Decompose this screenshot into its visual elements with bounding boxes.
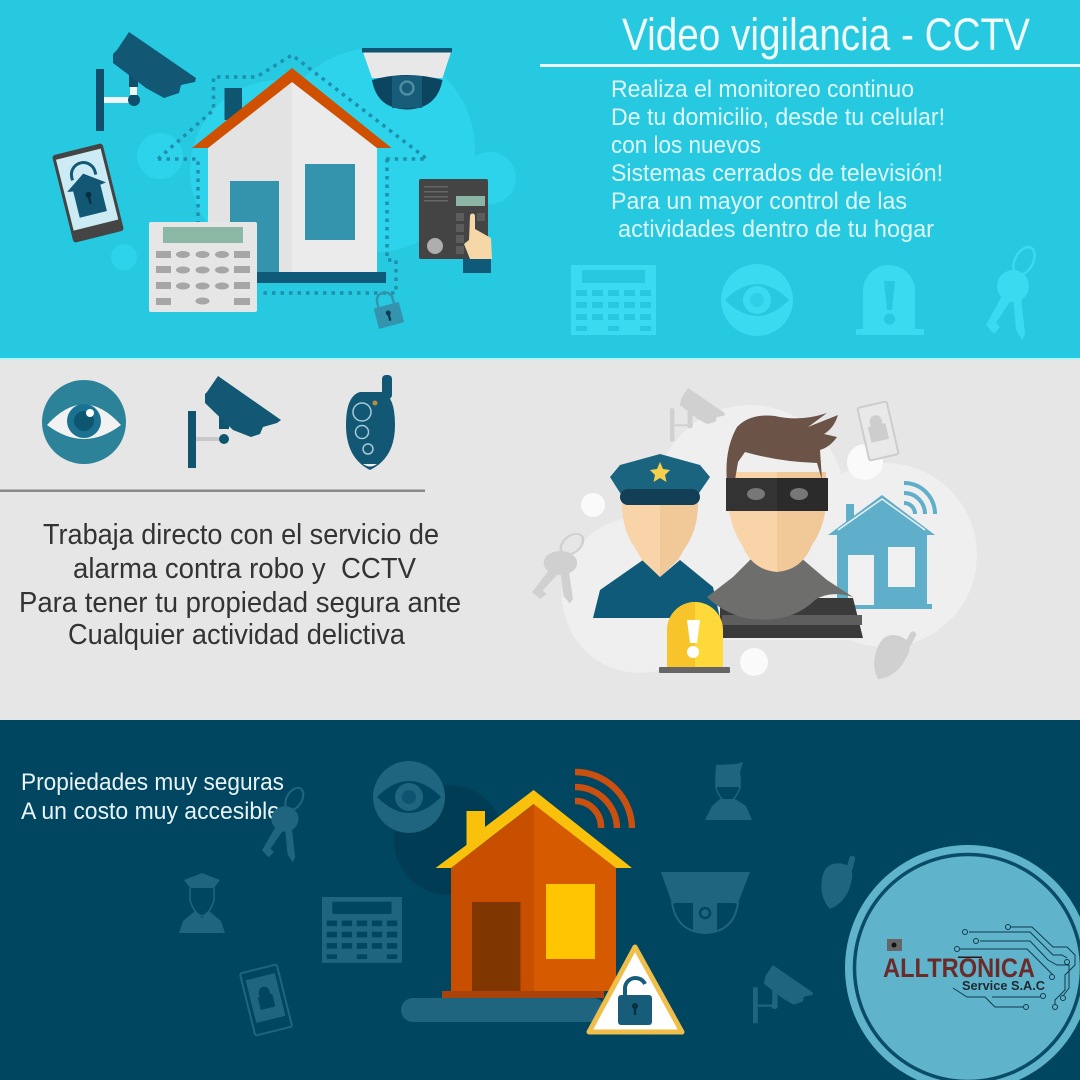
text block: top description: actividades dentro de tu hogar (618, 216, 934, 243)
icon: orange wifi waves (575, 772, 632, 828)
icon: yellow alarm beacon (659, 602, 730, 673)
text block: top description: Realiza el monitoreo continuo (611, 76, 914, 103)
dotted perimeter (158, 55, 427, 293)
text block: top description: De tu domicilio, desde tu celular! (611, 104, 945, 131)
faded icon row (571, 244, 1039, 340)
icon: padlock (370, 289, 404, 329)
icon: orange house (401, 790, 632, 1022)
thief silhouette (705, 762, 752, 820)
logo: Alltronica badge (845, 845, 1080, 1080)
text block: middle description: Cualquier actividad delictiva (68, 619, 406, 651)
text block: middle description: Trabaja directo con el servicio de (43, 519, 439, 551)
text block: middle description: alarma contra robo y CCTV (73, 553, 417, 585)
panel: dark bottom band (0, 720, 1080, 1080)
house shadow (394, 785, 504, 895)
dome silhouette (661, 872, 750, 933)
icon: remote (346, 375, 395, 470)
text block: top description (611, 76, 945, 243)
text block: middle description: Para tener tu propiedad segura ante (19, 587, 461, 619)
text block: top description: con los nuevos (611, 132, 761, 159)
text block: top description: Sistemas cerrados de televisión! (611, 160, 943, 187)
icon: policeman (593, 454, 720, 618)
cop silhouette (179, 873, 225, 933)
house background blobs (111, 48, 516, 270)
text block: bottom tagline: A un costo muy accesible (21, 798, 280, 825)
icon: intercom with finger (419, 179, 492, 273)
faded icons (179, 761, 858, 1036)
icon: smartphone with lock (52, 143, 124, 243)
logo mark (887, 939, 902, 951)
icon: alarm keypad (149, 222, 257, 312)
text block: bottom tagline: Propiedades muy seguras (21, 769, 284, 796)
icon: masked thief (707, 413, 863, 638)
icon: house with wifi (828, 483, 935, 609)
icon: main house (192, 68, 392, 283)
icon: eye (42, 380, 126, 464)
logo subtitle: Service S.A.C (962, 979, 1045, 993)
logo wordmark: ALLTRONICA (883, 953, 1035, 983)
panel: gray middle band (0, 360, 1080, 720)
circuit traces (953, 924, 1075, 1010)
icon: dome camera (362, 48, 452, 110)
panel: cyan top band (0, 0, 1080, 360)
text block: top description: Para un mayor control de las (611, 188, 907, 215)
phone silhouette (240, 964, 292, 1036)
text block: bottom tagline (21, 769, 284, 825)
text block: middle description (19, 519, 461, 651)
illustration background blobs (562, 405, 977, 676)
icon: warning triangle with open lock (589, 947, 682, 1032)
icon: wall camera (96, 32, 196, 131)
icon: security camera (188, 376, 281, 468)
faded icons (532, 388, 919, 686)
